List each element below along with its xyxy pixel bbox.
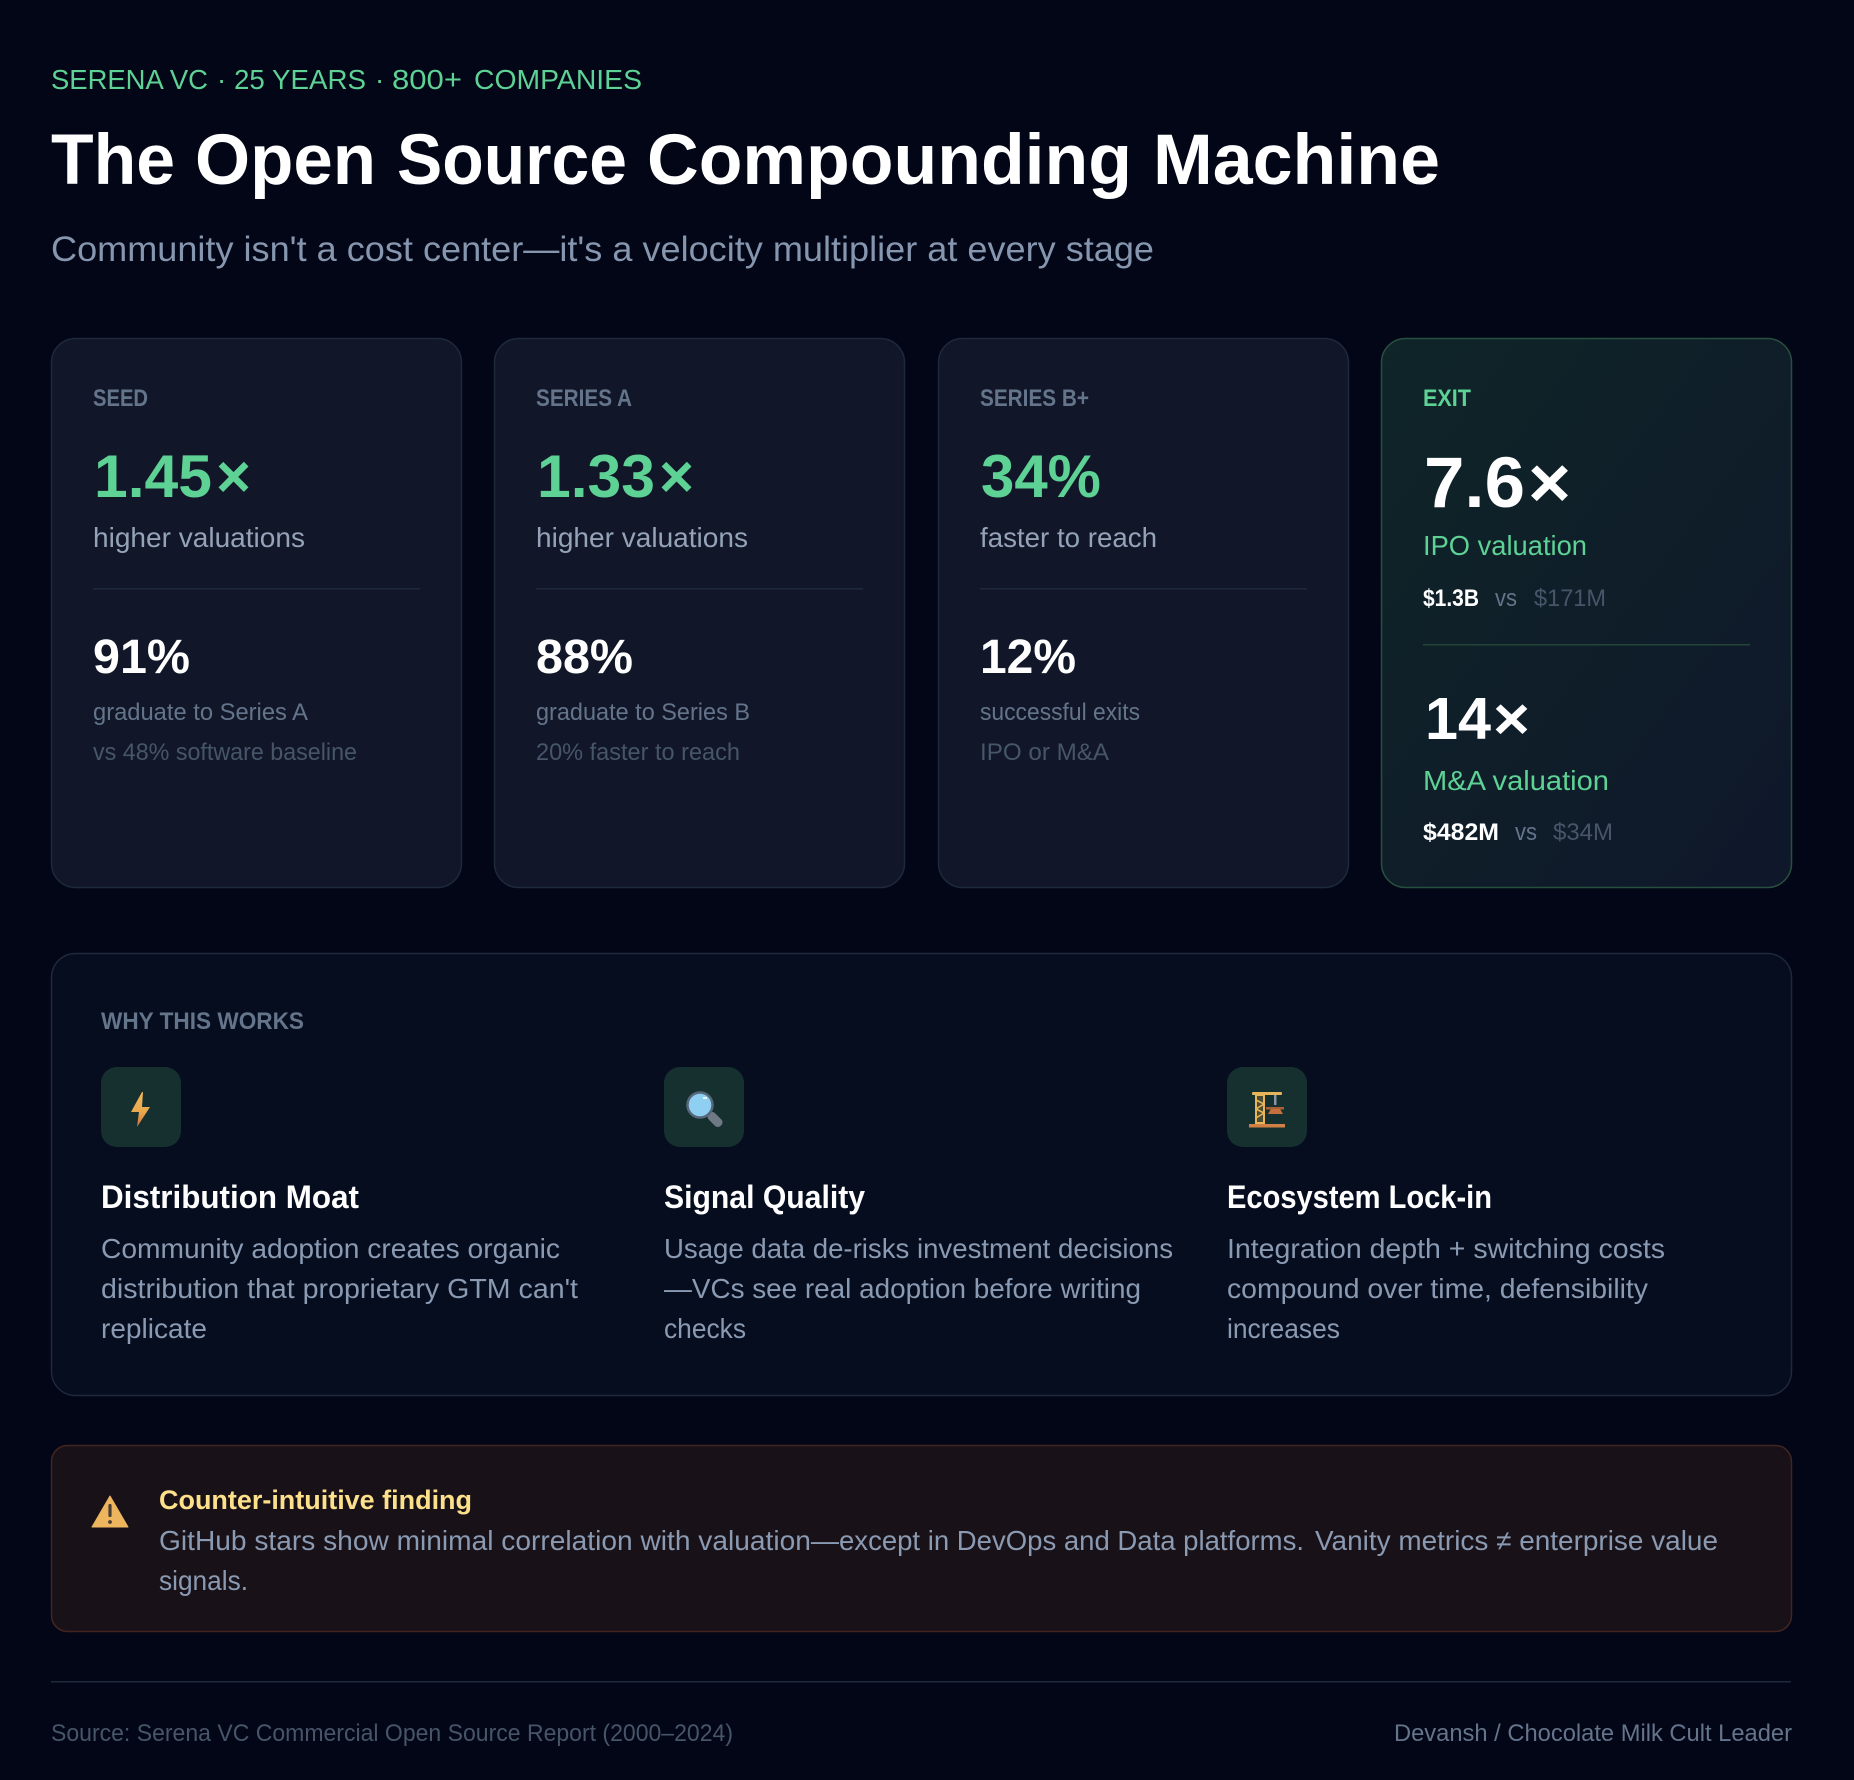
IPO comparison: $1.3B (1423, 585, 1479, 612)
exits note: IPO or M&A (980, 739, 1109, 766)
title: Machine (1153, 121, 1440, 200)
description: increases (1227, 1313, 1340, 1344)
IPO multiple (1424, 444, 1571, 523)
callout body: Vanity metrics ≠ enterprise value (1315, 1525, 1718, 1556)
M&A multiple (1425, 686, 1530, 752)
M&A comparison: $34M (1553, 819, 1613, 846)
footer: source: Source: Serena VC Commercial Open Source Report (2000–2024) (51, 1720, 733, 1747)
heading: Distribution Moat (101, 1179, 359, 1215)
panel: why this works (52, 954, 1792, 1396)
IPO comparison: vs (1495, 585, 1517, 612)
callout body: except in DevOps and Data platforms. (839, 1525, 1304, 1556)
panel: series B+ stage (938, 338, 1348, 888)
heading: Signal Quality (664, 1179, 865, 1215)
title: The (51, 121, 175, 200)
valuation caption: higher valuations (536, 522, 748, 553)
description: —VCs see real adoption before writing (664, 1273, 1141, 1304)
callout body: signals. (159, 1565, 248, 1596)
eyebrow: SERENA VC (51, 64, 208, 95)
column: signal quality (664, 1067, 1173, 1344)
description: checks (664, 1313, 746, 1344)
stage label: EXIT (1423, 385, 1471, 412)
description: Integration depth + switching costs (1227, 1233, 1665, 1264)
eyebrow: 25 YEARS (234, 64, 366, 95)
stage label: SEED (93, 385, 148, 412)
eyebrow: · (217, 64, 226, 95)
M&A multiple: × (1493, 686, 1530, 752)
panel: seed stage (52, 338, 462, 888)
column: distribution moat (101, 1067, 578, 1344)
eyebrow: 800+ (392, 64, 462, 95)
panel: exit stage (1382, 338, 1792, 888)
description: replicate (101, 1313, 207, 1344)
footer: author: Devansh / Chocolate Milk Cult Leader (1394, 1720, 1792, 1747)
subtitle: Community isn't a cost center—it's a velocity multiplier at every stage (51, 229, 1154, 269)
M&A multiple: 14 (1425, 686, 1491, 752)
title: Open (195, 121, 376, 200)
icon: magnifying glass (664, 1067, 744, 1147)
IPO comparison (1423, 585, 1606, 612)
description (1227, 1233, 1665, 1344)
graduation stat: 91% (93, 631, 190, 684)
IPO comparison: $171M (1534, 585, 1606, 612)
description: Community adoption creates organic (101, 1233, 560, 1264)
stage label: SERIES A (536, 385, 632, 412)
description: distribution that proprietary GTM can't (101, 1273, 578, 1304)
callout body: GitHub stars show minimal correlation with valuation— (159, 1525, 839, 1556)
stage label: SERIES B+ (980, 385, 1089, 412)
callout title: Counter-intuitive finding (159, 1485, 472, 1515)
header (51, 64, 1440, 269)
description: Usage data de-risks investment decisions (664, 1233, 1173, 1264)
M&A caption: M&A valuation (1423, 765, 1609, 796)
M&A comparison: vs (1515, 819, 1537, 846)
baseline note: vs 48% software baseline (93, 739, 357, 766)
IPO caption: IPO valuation (1423, 530, 1587, 561)
speed stat: 34% (981, 443, 1101, 510)
description: compound over time, defensibility (1227, 1273, 1648, 1304)
valuation stat: × (216, 443, 251, 510)
M&A comparison (1423, 819, 1613, 846)
graduation caption: graduate to Series B (536, 699, 750, 726)
icon: warning triangle (92, 1496, 128, 1527)
speed caption: faster to reach (980, 522, 1157, 553)
exits stat: 12% (980, 631, 1076, 684)
M&A comparison: $482M (1423, 819, 1499, 846)
section heading: WHY THIS WORKS (101, 1008, 304, 1035)
eyebrow: COMPANIES (474, 64, 642, 95)
column: ecosystem lock-in (1227, 1067, 1665, 1344)
heading: Ecosystem Lock-in (1227, 1179, 1492, 1215)
valuation stat: 1.33 (537, 443, 655, 510)
callout: counter-intuitive finding (52, 1446, 1792, 1632)
valuation caption: higher valuations (93, 522, 305, 553)
eyebrow: · (375, 64, 384, 95)
title: Compounding (647, 121, 1132, 200)
valuation stat: × (659, 443, 694, 510)
valuation stat: 1.45 (94, 443, 212, 510)
graduation stat: 88% (536, 631, 633, 684)
exits caption: successful exits (980, 699, 1140, 726)
panel: series A stage (494, 338, 904, 888)
description (664, 1233, 1173, 1344)
icon: construction crane (1227, 1067, 1307, 1147)
description (101, 1233, 578, 1344)
title (51, 121, 1440, 200)
graduation caption: graduate to Series A (93, 699, 308, 726)
callout body (159, 1525, 1718, 1596)
title: Source (397, 121, 627, 200)
icon: lightning bolt (101, 1067, 181, 1147)
eyebrow (51, 64, 642, 95)
speed note: 20% faster to reach (536, 739, 740, 766)
IPO multiple: 7.6 (1424, 444, 1525, 523)
IPO multiple: × (1528, 444, 1571, 523)
